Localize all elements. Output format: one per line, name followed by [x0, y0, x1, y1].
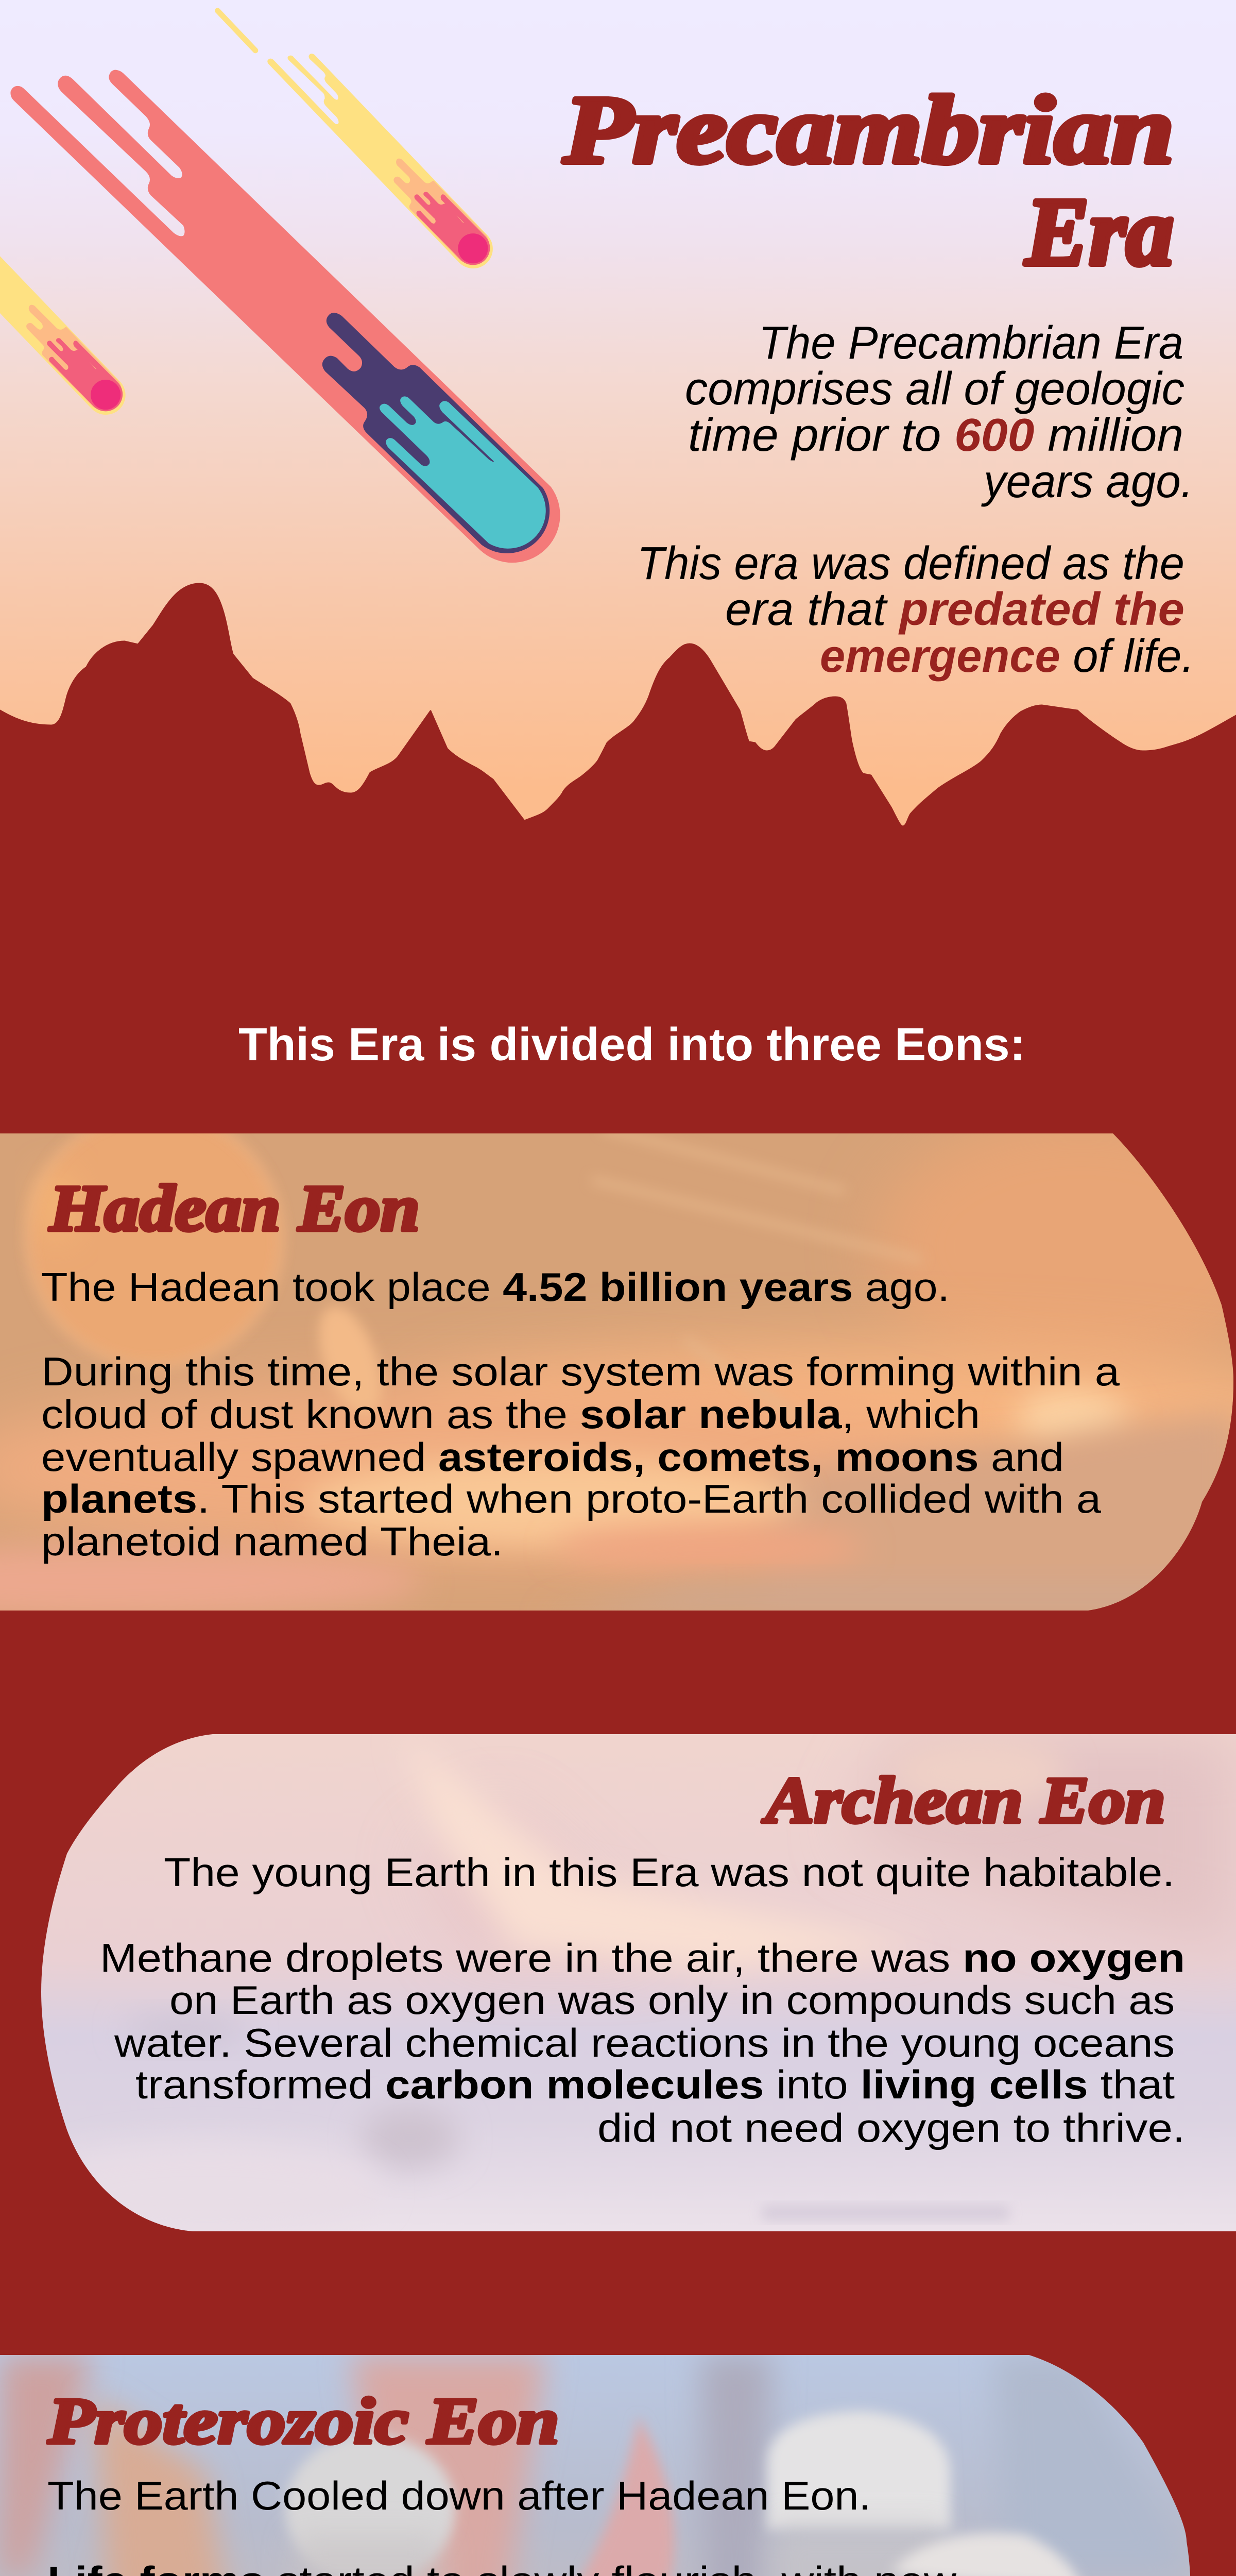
text: Hadean description: planets . This started when proto-Earth collided with a: [41, 1476, 1102, 1521]
text: Archean description: transformed carbon molecules into living cells that: [135, 2062, 1175, 2107]
text: Hadean description: [41, 1349, 1120, 1564]
icon: small yellow comet, upper: [217, 11, 493, 268]
text: Archean description: Methane droplets were in the air, there was no oxygen: [100, 1935, 1185, 1980]
panel: Hadean Eon: [0, 1111, 1236, 1618]
panel background: sea life scene: [0, 2355, 1236, 2576]
text: Hadean description: During this time, the solar system was forming within a: [41, 1349, 1120, 1394]
text: Hadean age: The Hadean took place 4.52 billion years ago.: [41, 1264, 950, 1310]
text block: era definition: comprises all of geologic: [685, 363, 1184, 415]
title: Precambrian Era: Era: [1024, 178, 1174, 285]
text block: era predated life: [637, 538, 1194, 682]
text block: era predated life: This era was defined as the: [637, 538, 1184, 589]
hero sky gradient: [0, 0, 1236, 876]
panel background: molten planet scene: [0, 1111, 1236, 1618]
icon: large coral and teal comet: [10, 70, 560, 563]
heading: Hadean Eon: Hadean Eon: [49, 1172, 420, 1245]
text block: era definition: time prior to 600 million: [688, 410, 1183, 461]
text: Hadean description: eventually spawned asteroids, comets, moons and: [41, 1434, 1064, 1480]
text: Earth cooled: The Earth Cooled down after Hadean Eon.: [47, 2473, 871, 2518]
text: Archean description: did not need oxygen to thrive.: [597, 2105, 1185, 2150]
panel background: volcano and shore scene: [0, 1734, 1236, 2236]
text block: era predated life: era that predated the: [725, 584, 1184, 635]
text: Archean description: [100, 1935, 1185, 2150]
text: Hadean description: cloud of dust known as the solar nebula , which: [41, 1392, 980, 1437]
text: Hadean description: planetoid named Theia.: [41, 1519, 503, 1564]
title: Precambrian Era: [563, 76, 1174, 285]
text block: era predated life: emergence of life.: [820, 631, 1194, 682]
heading: three eons: This Era is divided into three Eons:: [238, 1019, 1025, 1071]
heading: Proterozoic Eon: Proterozoic Eon: [47, 2384, 559, 2458]
mountain silhouette: [0, 584, 1236, 927]
text block: era definition: years ago.: [981, 456, 1193, 507]
panel: Proterozoic Eon: [0, 2355, 1236, 2576]
icon: small yellow comet, lower left: [0, 200, 126, 415]
heading: Archean Eon: Archean Eon: [762, 1764, 1165, 1837]
title: Precambrian Era: Precambrian: [563, 76, 1174, 183]
text block: era definition: The Precambrian Era: [759, 317, 1183, 369]
text block: era definition: [685, 317, 1193, 507]
text: Archean description: water. Several chemical reactions in the young oceans: [114, 2020, 1175, 2065]
text: Archean habitability: The young Earth in this Era was not quite habitable.: [164, 1850, 1175, 1895]
text: Archean description: on Earth as oxygen was only in compounds such as: [169, 1977, 1175, 2023]
panel: Archean Eon: [0, 1734, 1236, 2236]
